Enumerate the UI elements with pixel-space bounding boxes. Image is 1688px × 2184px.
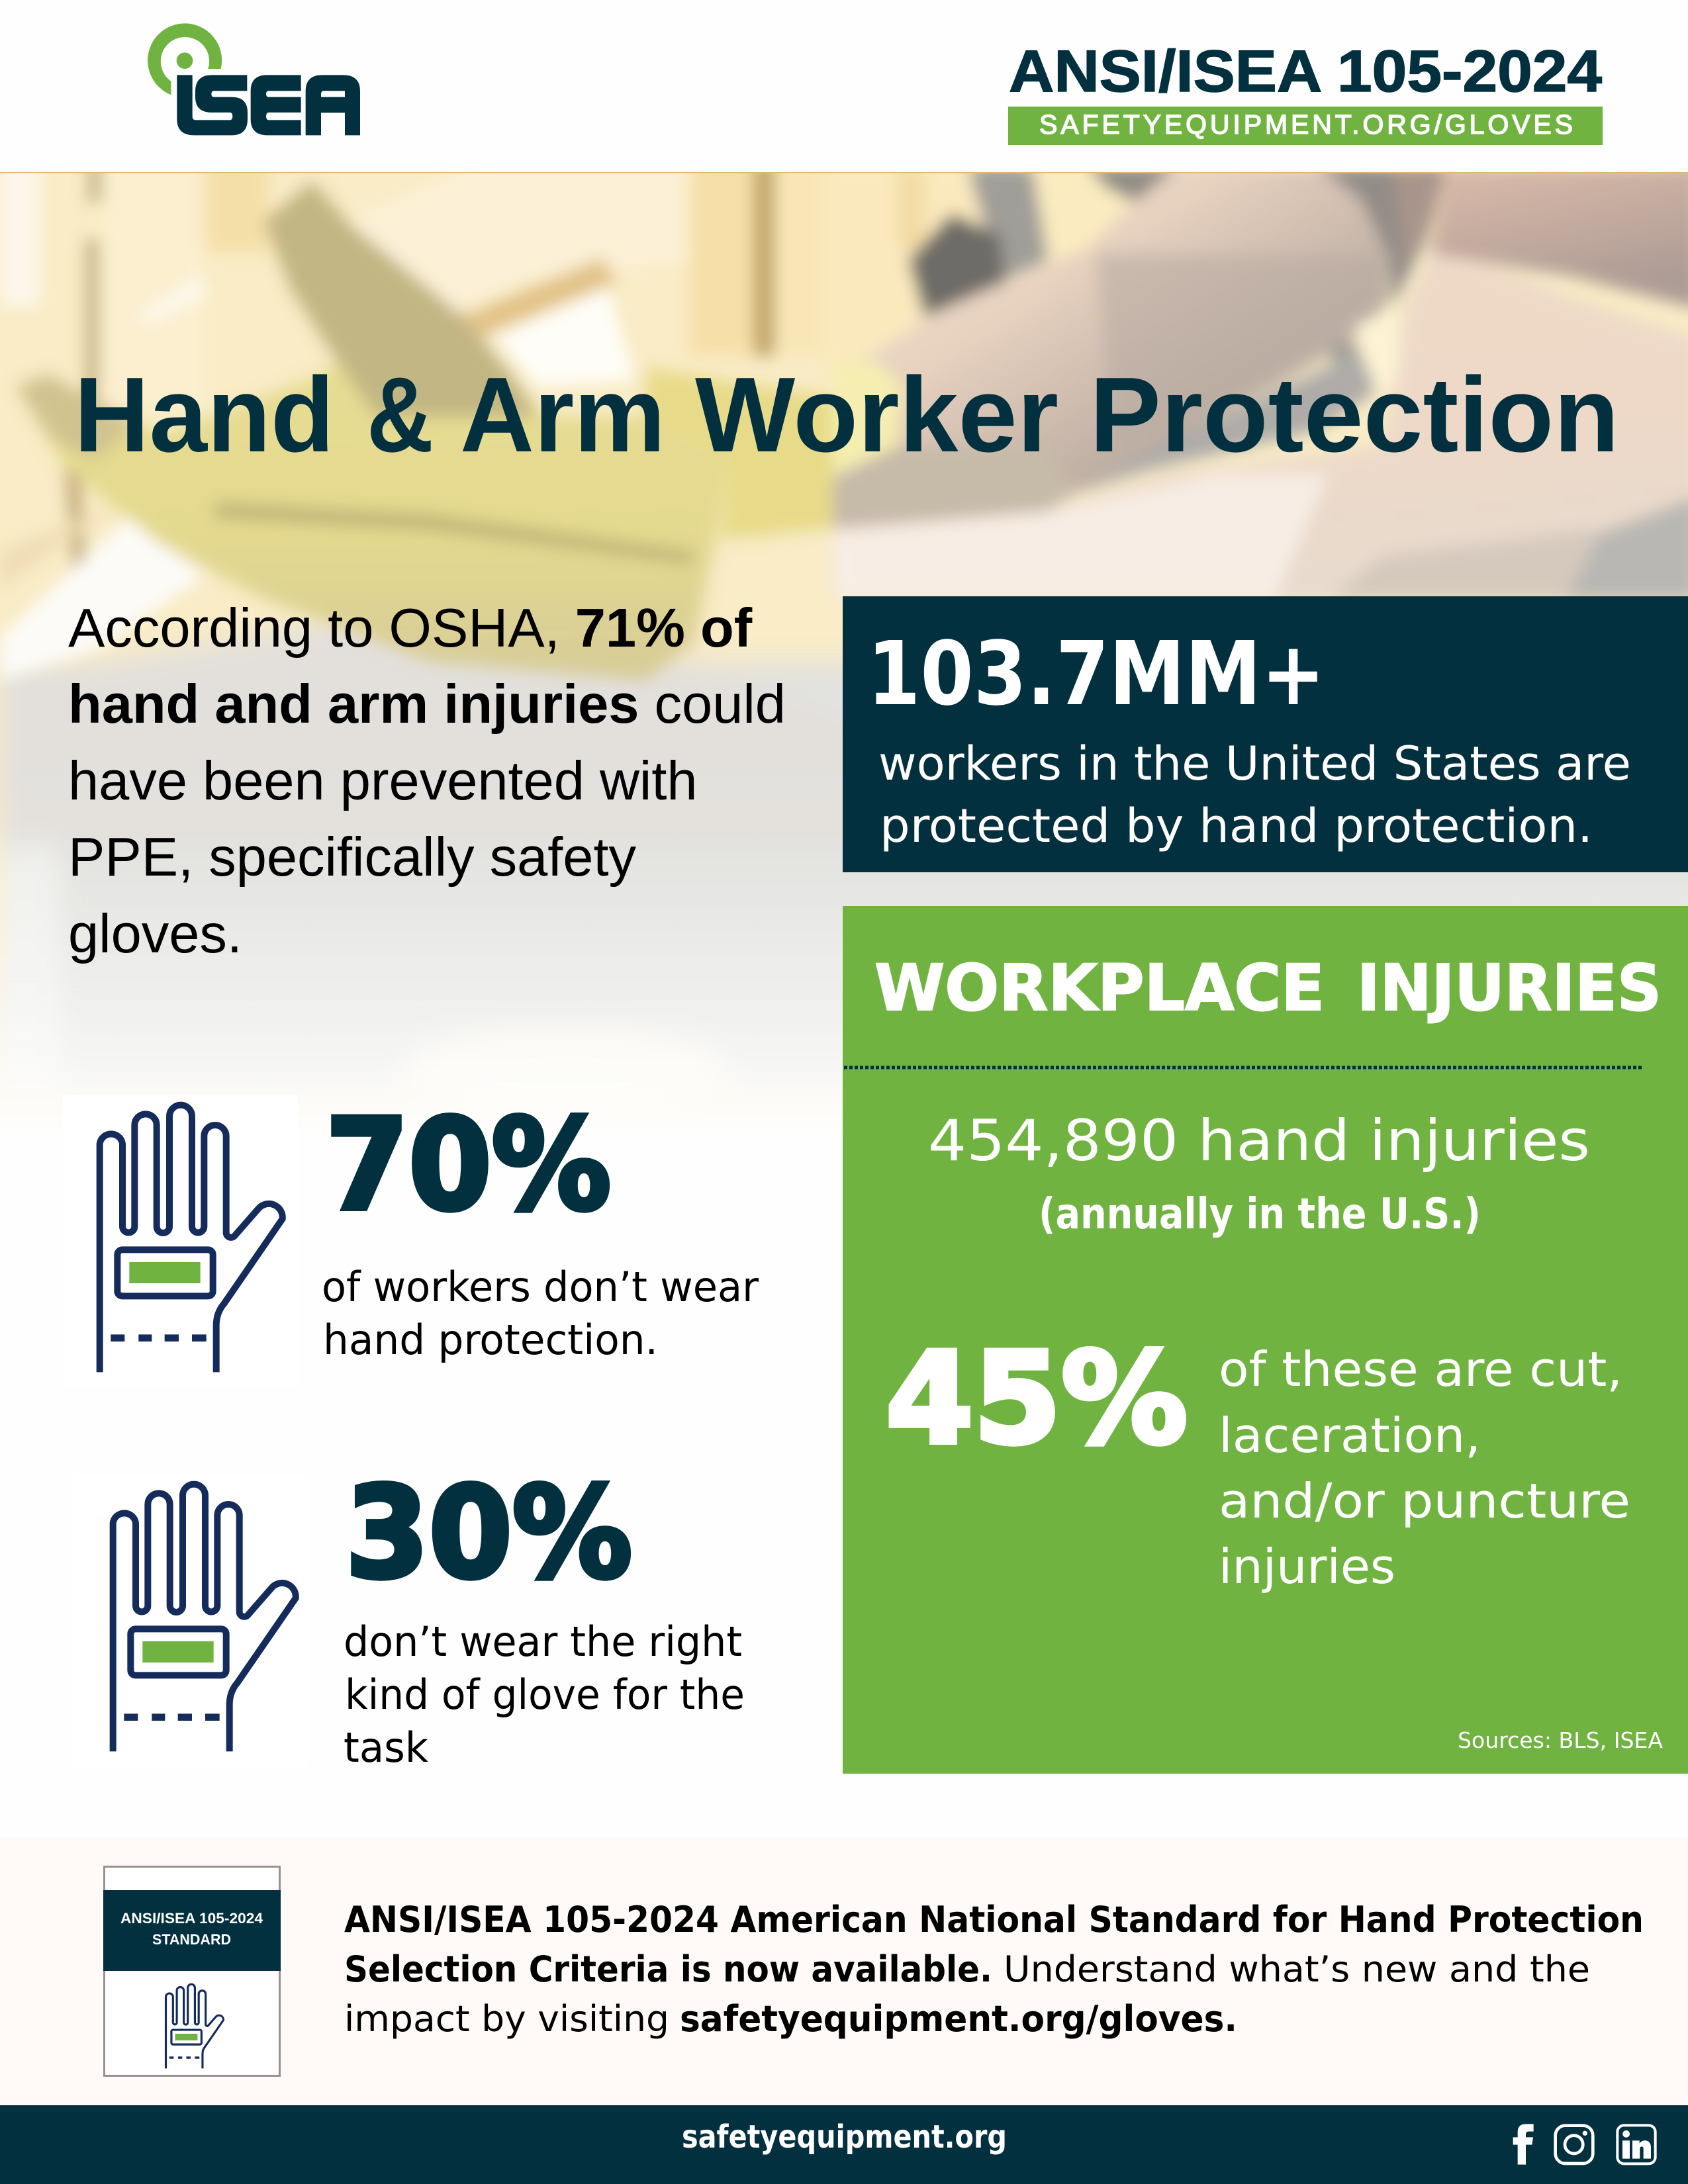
70% description [322,1263,759,1364]
header band [0,0,1688,173]
cover title: ANSI/ISEA 105-2024 [120,1910,263,1927]
panel: standard announcement [0,1837,1688,2105]
panel: workers protected [843,596,1688,872]
stat: 45%: 45% [886,1326,1188,1472]
workplace injuries heading: WORKPLACE [874,951,1325,1025]
announcement text: Understand what’s new and the [1004,1948,1590,1990]
workers description: workers in the United States are [878,737,1631,791]
OSHA intro text: gloves. [68,903,242,964]
45% description: injuries [1219,1539,1395,1594]
standard name heading: ANSI/ISEA 105-2024 [1009,38,1603,104]
footer bar [0,2105,1688,2184]
70% description: of workers don’t wear [322,1263,759,1311]
standard cover thumbnail [103,1866,281,2075]
OSHA intro text: According to OSHA, 71% of [68,597,752,659]
30% description: kind of glove for the [345,1670,745,1719]
30% description: task [344,1723,428,1772]
footer URL: safetyequipment.org [682,2118,1007,2156]
icon: facebook [1513,2124,1534,2165]
workplace injuries heading [874,951,1662,1025]
panel: workplace injuries [843,906,1688,1774]
announcement text: Selection Criteria is now available. [344,1948,992,1990]
45% description: laceration, [1219,1408,1481,1463]
announcement text: safetyequipment.org/gloves. [680,1998,1237,2040]
title [74,355,1619,475]
icon: linkedin [1617,2125,1656,2163]
stat: 30%: 30% [346,1460,632,1606]
OSHA intro text: hand and arm injuries could [68,673,786,735]
45% description: and/or puncture [1219,1473,1630,1529]
30% description [344,1617,745,1772]
title: Arm [460,355,665,475]
hero background photo: gloved hand and arm [0,160,1688,1140]
70% description: hand protection. [323,1316,658,1364]
cover title [120,1910,263,1948]
big number: 103.7MM+: 103.7MM+ [867,623,1325,725]
hand injuries count: 454,890 hand injuries [928,1108,1590,1174]
announcement text [344,1899,1644,2040]
cover title: STANDARD [152,1931,231,1948]
title: Hand [74,355,334,475]
45% description: of these are cut, [1219,1342,1622,1397]
announcement text: impact by visiting [344,1998,669,2040]
title: Worker [695,355,1058,475]
30% description: don’t wear the right [344,1617,742,1666]
OSHA intro text: PPE, specifically safety [68,826,637,887]
title: Protection [1090,355,1619,475]
sources note: Sources: BLS, ISEA [1458,1727,1663,1753]
workers description: protected by hand protection. [880,799,1593,853]
icon: glove 30% [73,1475,308,1767]
workers description [878,737,1631,853]
45% description [1219,1342,1630,1594]
title: & [367,355,434,475]
stat: 70%: 70% [326,1092,611,1238]
OSHA intro text: have been prevented with [68,750,698,811]
icon: small glove [166,1984,223,2068]
green URL bar: SAFETYEQUIPMENT.ORG/GLOVES [1039,109,1573,140]
icon: instagram [1556,2126,1593,2163]
ISEA logo [148,23,360,135]
icon: glove 70% [63,1095,298,1387]
workplace injuries heading: INJURIES [1357,951,1662,1025]
annually note: (annually in the U.S.) [1039,1190,1481,1239]
